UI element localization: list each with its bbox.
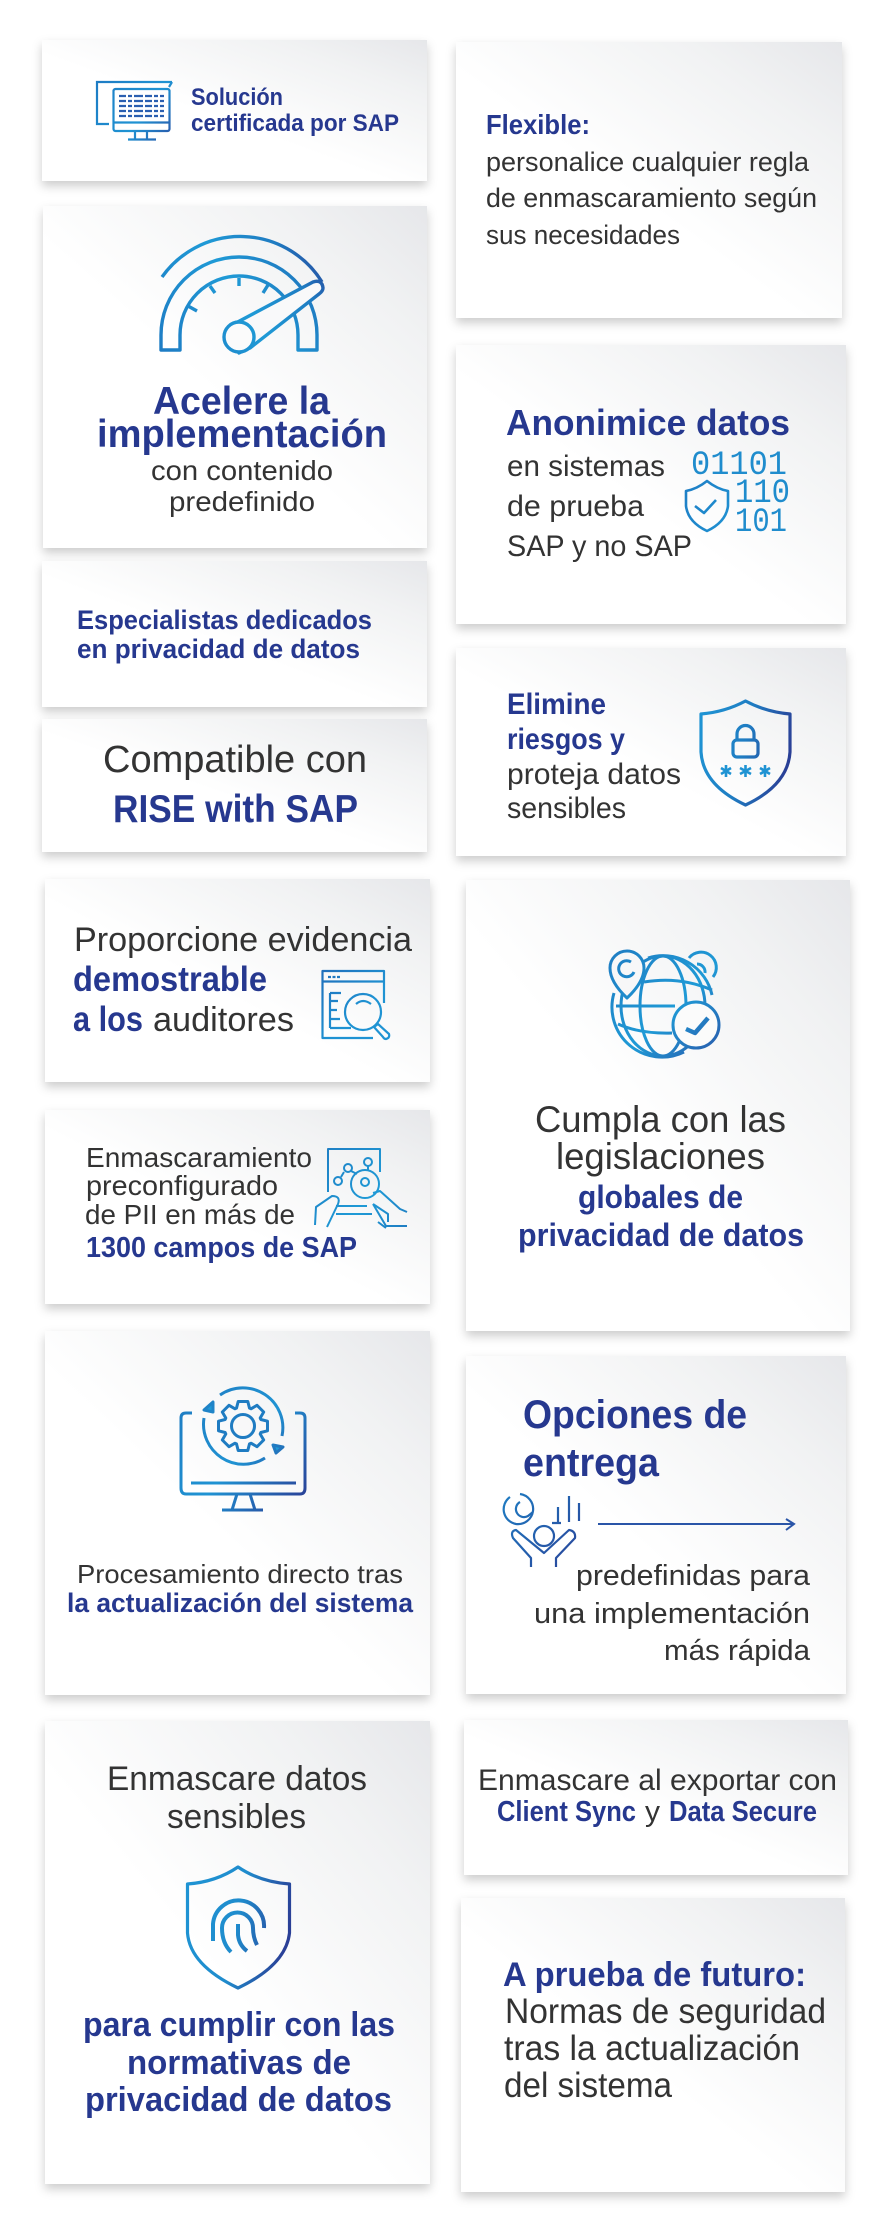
heading bbox=[523, 1393, 747, 1485]
text bbox=[518, 1099, 804, 1253]
text top: sensibles bbox=[167, 1798, 306, 1836]
heading: privacidad de datos bbox=[85, 2081, 392, 2119]
text: 1300 campos de SAP bbox=[86, 1232, 357, 1264]
icon: person with charts bbox=[504, 1494, 579, 1567]
body text: Normas de seguridad bbox=[505, 1992, 826, 2031]
body text: predefinidas para bbox=[576, 1560, 811, 1592]
heading: Acelere la bbox=[153, 380, 330, 423]
heading bbox=[97, 380, 387, 456]
text bbox=[73, 921, 412, 1039]
body text: de enmascaramiento según bbox=[486, 183, 817, 213]
panel: Especialistas dedicados bbox=[42, 561, 427, 707]
text: legislaciones bbox=[556, 1136, 765, 1177]
text: de PII en más de bbox=[85, 1199, 295, 1230]
icon: speedometer bbox=[161, 236, 323, 353]
icon: fingerprint shield bbox=[188, 1867, 290, 1988]
arrow bbox=[598, 1519, 794, 1530]
body text: SAP y no SAP bbox=[507, 530, 692, 563]
body text: una implementación bbox=[534, 1598, 810, 1630]
icon: certified monitor bbox=[97, 82, 172, 140]
heading: Opciones de bbox=[523, 1393, 747, 1437]
text: auditores bbox=[153, 1001, 294, 1039]
icon: binary shield: 101 bbox=[735, 504, 787, 542]
body text: más rápida bbox=[664, 1635, 811, 1667]
text: Compatible con bbox=[103, 739, 367, 781]
heading bbox=[77, 605, 372, 664]
heading bbox=[191, 84, 399, 137]
heading: implementación bbox=[97, 413, 387, 456]
body text: en sistemas bbox=[507, 450, 665, 483]
text: RISE with SAP bbox=[113, 788, 358, 831]
icon: hands with tablet and key bbox=[315, 1149, 407, 1228]
text: Enmascaramiento bbox=[86, 1142, 312, 1173]
body text bbox=[534, 1560, 811, 1667]
heading: en privacidad de datos bbox=[77, 634, 360, 664]
panel: Elimine riesgos bbox=[456, 648, 846, 856]
text bbox=[507, 688, 681, 825]
panel: Acelere la implementación bbox=[43, 206, 427, 548]
text bbox=[85, 1142, 357, 1264]
body text bbox=[507, 450, 692, 563]
panel: Enmascare al exportar bbox=[464, 1720, 848, 1875]
text bbox=[67, 1559, 414, 1618]
panel: Cumpla con las legislaciones bbox=[466, 880, 850, 1331]
panel: Anonimice datos bbox=[456, 345, 846, 624]
text top: Enmascare datos bbox=[107, 1760, 367, 1798]
icon: globe with pin and check bbox=[610, 951, 719, 1057]
text: Data Secure bbox=[669, 1796, 817, 1828]
text: Elimine bbox=[507, 688, 606, 721]
text top bbox=[107, 1760, 367, 1836]
heading: normativas de bbox=[127, 2044, 351, 2082]
text: globales de bbox=[578, 1179, 743, 1215]
body text bbox=[486, 147, 817, 250]
heading: Solución bbox=[191, 84, 283, 111]
panel: Compatible con RISE bbox=[42, 719, 427, 852]
panel: Solución certificada bbox=[42, 40, 427, 181]
body text: del sistema bbox=[504, 2066, 672, 2105]
text: Client Sync bbox=[497, 1796, 636, 1828]
heading: A prueba de futuro: bbox=[503, 1956, 806, 1994]
subtext: con contenido bbox=[151, 455, 333, 486]
subtext: predefinido bbox=[169, 486, 315, 517]
icon: monitor with gear bbox=[181, 1388, 305, 1510]
text: Enmascare al exportar con bbox=[478, 1764, 837, 1797]
text: riesgos y bbox=[507, 723, 625, 756]
body text bbox=[504, 1992, 826, 2105]
body text: sus necesidades bbox=[486, 220, 680, 250]
heading: Anonimice datos bbox=[506, 402, 790, 443]
icon: document search bbox=[322, 971, 389, 1039]
heading: Flexible: bbox=[486, 109, 590, 140]
body text: de prueba bbox=[507, 490, 644, 523]
text: la actualización del sistema bbox=[67, 1588, 414, 1618]
heading: Especialistas dedicados bbox=[77, 605, 372, 635]
text: Procesamiento directo tras bbox=[77, 1559, 403, 1589]
panel: A prueba de futuro bbox=[461, 1898, 845, 2192]
text: y bbox=[645, 1796, 661, 1828]
text: privacidad de datos bbox=[518, 1217, 804, 1253]
text: proteja datos bbox=[507, 758, 681, 791]
text: Cumpla con las bbox=[535, 1099, 786, 1140]
text: Proporcione evidencia bbox=[74, 921, 412, 959]
icon: lock shield bbox=[701, 701, 790, 805]
body text: personalice cualquier regla bbox=[486, 147, 810, 177]
icon: binary shield: 01101 bbox=[691, 447, 787, 485]
text bbox=[103, 739, 367, 831]
subtext bbox=[151, 455, 333, 517]
panel: Proporcione evidencia bbox=[45, 879, 430, 1082]
icon: binary shield bbox=[686, 447, 790, 542]
heading: certificada por SAP bbox=[191, 110, 399, 137]
text: demostrable bbox=[73, 960, 267, 999]
panel: Procesamiento directo bbox=[45, 1331, 430, 1695]
icon: binary shield: 110 bbox=[735, 475, 790, 513]
body text: tras la actualización bbox=[504, 2029, 800, 2068]
heading: para cumplir con las bbox=[83, 2006, 395, 2044]
text bbox=[478, 1764, 837, 1828]
text: sensibles bbox=[507, 792, 626, 825]
panel: Enmascaramiento preconfigurado bbox=[45, 1110, 430, 1304]
panel: Flexible bbox=[456, 42, 842, 318]
panel: Opciones de entrega bbox=[466, 1356, 846, 1694]
heading bbox=[83, 2006, 395, 2119]
heading: entrega bbox=[523, 1441, 660, 1485]
text: a los bbox=[73, 1000, 143, 1039]
text: preconfigurado bbox=[86, 1170, 278, 1201]
panel: Enmascare datos sensibles bbox=[45, 1721, 430, 2184]
